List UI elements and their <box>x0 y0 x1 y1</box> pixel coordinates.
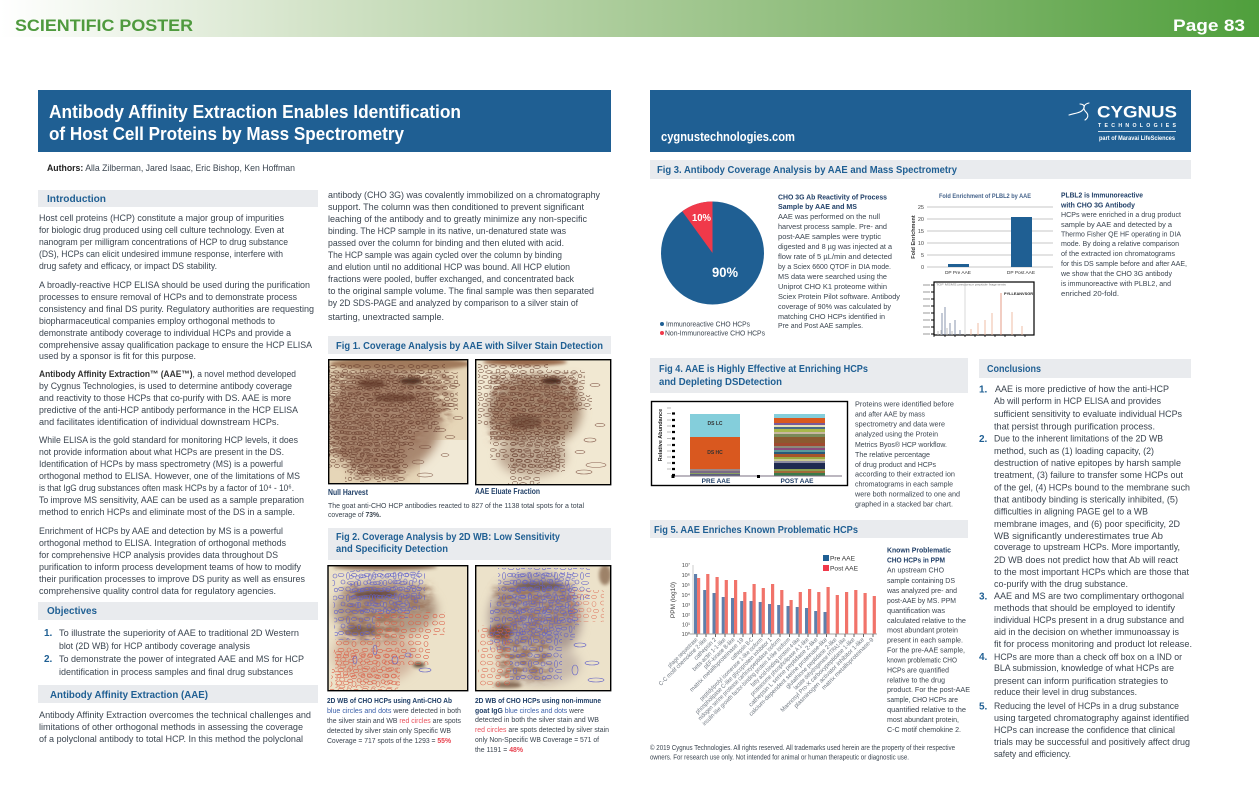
text: known problematic HCPs: For the pre-AAE sample, <box>887 646 965 654</box>
list: objectives: To illustrate the superiority of AAE to traditional 2D Western <box>59 628 299 638</box>
text: AAE right column: fractions were pooled, buffer exchanged, and concentrated back <box>328 274 574 284</box>
bar chart: fold enrichment: Fold Enrichment <box>911 215 917 259</box>
x-axis labels: calcium-dependent serine proteinase-like <box>748 637 829 718</box>
list: conclusions: HCPs can increase the confidence that clinical <box>994 725 1175 735</box>
text: introduction: their purification processes to improve DS purity as well as ensures <box>39 574 305 584</box>
stacked bar chart: POST AAE <box>780 478 814 485</box>
text: introduction: orthogonal method to ELISA. However, one of the limitations of MS <box>39 471 300 481</box>
list: conclusions: Due to the inherent limitations of the 2D WB <box>994 434 1163 444</box>
text: introduction: comprehensive quality control data for regulatory agencies. <box>39 586 276 596</box>
banner: website and logo <box>650 90 1191 152</box>
list: conclusions: coverage to upstream HCPs. More importantly, <box>994 542 1180 552</box>
text: Fig 1 note: The goat anti-CHO HCP antibodies reacted to 827 of the 1138 total spots for a total <box>328 501 584 510</box>
x-axis labels: phospholipase C-like glycoprotein inhibitor 1 <box>695 637 774 716</box>
text: Fig 1 note <box>328 501 584 519</box>
image frame: null harvest <box>329 360 468 484</box>
list: conclusions: using targeted chromatography against identified <box>994 713 1189 723</box>
chart legend <box>823 555 859 572</box>
text: Fig 4 description: and after AAE by mass <box>855 410 925 418</box>
bar chart: fold enrichment: 20 <box>918 217 924 223</box>
text: known problematic HCPs: Known Problematic <box>887 546 951 554</box>
caption: WB non-immune: goat IgG blue circles and dots were <box>475 706 584 715</box>
text: CHO 3G reactivity: CHO 3G Ab Reactivity of Process <box>778 192 887 202</box>
text: Fig 1 note: coverage of 73%. <box>328 510 381 519</box>
list: conclusions: 2D WB does not predict how that Ab will react <box>994 555 1178 565</box>
text: introduction: Host cell proteins (HCP) constitute a major group of impurities <box>39 213 284 223</box>
image frame: WB anti-CHO <box>328 566 468 691</box>
y-axis labels: 10³ <box>682 603 690 609</box>
text: Fig 4 description: analyzed using the Protein <box>855 430 938 438</box>
text: AAE right column: support. The column was then conditioned to prevent significant <box>328 202 584 212</box>
text: known problematic HCPs: CHO HCPs in PPM <box>887 556 945 564</box>
chart legend: Pre AAE <box>830 556 856 562</box>
pie chart <box>661 201 764 304</box>
panel: objectives heading: Objectives <box>47 605 97 617</box>
text: introduction: by Cygnus Technologies, is used to determine antibody coverage <box>39 381 292 391</box>
text: PLBL2: mode. By doing a relative comparison <box>1061 239 1179 248</box>
caption: WB non-immune <box>475 696 609 754</box>
text: introduction: purification to inform process development teams of how to modify <box>39 562 301 572</box>
text: introduction: Antibody Affinity Extraction™ (AAE™), a novel method developed <box>39 369 296 379</box>
y-axis labels <box>682 562 691 638</box>
caption: WB anti-CHO: the silver stain and WB red circles are spots <box>327 716 461 725</box>
list: conclusions: Reducing the level of HCPs in a drug substance <box>994 701 1179 711</box>
footer: copyright <box>650 743 955 762</box>
text: known problematic HCPs: relative to the drug <box>887 676 945 684</box>
text: CHO 3G reactivity: by a Sciex 6600 QTOF in DIA mode. <box>778 262 891 271</box>
panel: introduction heading <box>38 190 318 207</box>
list: conclusions: to the most important HCPs which are those that <box>994 567 1189 577</box>
caption: AAE eluate: AAE Eluate Fraction <box>475 487 540 496</box>
list: conclusions: BLA submission, knowledge of what HCPs are <box>994 663 1174 673</box>
list: objectives <box>44 628 304 677</box>
title banner <box>38 90 611 152</box>
image: null harvest gel <box>328 357 470 484</box>
panel: Fig 4 heading: Fig 4. AAE is Highly Effective at Enriching HCPs <box>659 363 868 375</box>
text: AAE left column: of a polyclonal antibody to total HCP. In this method the polyclonal <box>39 734 303 744</box>
list: conclusions: reduce their level in drug substances. <box>994 687 1137 697</box>
panel: Fig 4 heading <box>650 358 968 393</box>
x-axis labels: proteasome phospholipase A 1-like <box>750 637 811 698</box>
authors: Authors: Alla Zilberman, Jared Isaac, Eric Bishop, Ken Hoffman <box>47 163 295 174</box>
text: Fig 4 description: The relative percentage <box>855 450 930 459</box>
caption: WB anti-CHO: 2D WB of CHO HCPs using Anti-CHO Ab <box>327 696 452 705</box>
text: introduction: biopharmaceutical companies employ orthogonal methods to <box>39 316 275 326</box>
text: PLBL2 <box>1060 190 1187 298</box>
panel: Fig 3 heading <box>650 160 1191 179</box>
section label: SCIENTIFIC POSTER <box>15 16 193 35</box>
list: conclusions: membrane images, and (6) poor specificity, 2D <box>994 519 1180 529</box>
text: introduction: used by a sponsor is fit for this purpose. <box>39 351 196 361</box>
list: conclusions: of the gel, (4) HCPs bound to the membrane such <box>994 482 1190 492</box>
image frame: WB non-immune <box>476 566 611 691</box>
text: CHO 3G reactivity: Sample by AAE and MS <box>778 202 857 211</box>
page number: Page 83 <box>1173 16 1245 35</box>
text: introduction: A broadly-reactive HCP ELISA should be used during the purification <box>39 280 310 290</box>
bar chart: fold enrichment <box>911 194 1053 276</box>
text: introduction: processes to ensure removal of HCPs and to demonstrate process <box>39 292 297 302</box>
chart: mass spectrum: TOF MSMS precursor peptide fragments <box>936 282 1007 286</box>
text: known problematic HCPs: calculated relative to the <box>887 616 966 625</box>
bar chart: known problematic HCPs <box>658 555 877 727</box>
bar chart: fold enrichment: 25 <box>918 205 924 211</box>
text: AAE right column: The HCP sample was again cycled over the column by binding <box>328 250 562 260</box>
text: known problematic HCPs: C-C motif chemokine 2. <box>887 725 961 734</box>
text: introduction: While ELISA is the gold standard for monitoring HCP levels, it does <box>39 435 298 445</box>
text: known problematic HCPs: most abundant protein, <box>887 715 959 724</box>
text: known problematic HCPs: sample containing DS <box>887 576 955 585</box>
list: conclusions: 5. <box>979 702 988 712</box>
text: AAE right column: and elution until no additional HCP was bound. All HCP elution <box>328 262 570 272</box>
panel: Fig 1 heading: Fig 1. Coverage Analysis by AAE with Silver Stain Detection <box>336 340 603 352</box>
x-axis labels: Mannosyl Pro-X carboxypeptidase 1-like <box>780 637 857 714</box>
bar chart: fold enrichment: 5 <box>921 253 924 259</box>
list: conclusions: destruction of native epitopes by harsh sample <box>994 458 1181 468</box>
pie chart: 90% <box>712 264 739 280</box>
text: known problematic HCPs: An upstream CHO <box>887 566 944 574</box>
text: introduction: and facilitates identification of individual downstream HCPs. <box>39 417 279 427</box>
list: conclusions: difficulties in aligning PAGE gel to a WB <box>994 506 1148 516</box>
text: known problematic HCPs: was analyzed pre- and <box>886 586 957 595</box>
x-axis labels: pEF-kinase B-like <box>703 637 737 670</box>
text: CHO 3G reactivity: AAE was performed on the null <box>778 212 880 221</box>
list: conclusions: AAE is more predictive of how the anti-HCP <box>995 384 1169 394</box>
pie chart: 10% <box>692 212 712 224</box>
list: objectives: To demonstrate the power of integrated AAE and MS for HCP <box>59 654 304 664</box>
list: conclusions: WB significantly underestimates true Ab <box>994 531 1163 541</box>
caption: WB non-immune: red circles are spots detected by silver stain <box>475 725 609 734</box>
text: CHO 3G reactivity: harvest process sample. Pre- and <box>778 222 887 231</box>
list: conclusions: trials may be successful and positively affect drug <box>994 737 1190 747</box>
text: AAE right column: passed over the column for binding and then eluted with acid. <box>328 238 564 248</box>
list: conclusions: that antibody binding is sterically inhibited, (5) <box>994 494 1178 504</box>
panel: AAE heading: Antibody Affinity Extraction (AAE) <box>50 689 208 701</box>
text: CHO 3G reactivity <box>778 192 900 330</box>
bar chart: fold enrichment: 10 <box>918 241 924 247</box>
list: conclusions: methods that should be employed to identify <box>994 603 1175 613</box>
text: Fig 4 description: Metrics Byos® HCP workflow. <box>855 440 947 449</box>
text: introduction: method to enrich HCPs and eliminate most of the DS in a sample. <box>39 507 295 517</box>
text: AAE right column <box>328 190 600 322</box>
text: PLBL2: sample by AAE and detected by a <box>1061 220 1173 229</box>
list: conclusions: 4. <box>979 652 988 663</box>
pie legend: Immunoreactive CHO HCPs <box>666 320 750 328</box>
list: conclusions: co-purify with the drug substance. <box>994 579 1128 589</box>
panel: conclusions heading: Conclusions <box>987 363 1041 375</box>
pre AAE bar <box>690 414 740 476</box>
stacked bar chart: Relative Abundance <box>658 409 664 461</box>
text: AAE right column: leaching of the antibody and to greatly minimize any non-specific <box>328 214 587 224</box>
text: CHO 3G reactivity: Pre and Post AAE samples. <box>778 321 863 330</box>
text: known problematic HCPs: sample, CHO HCPs are <box>887 695 958 704</box>
x-axis labels: nidogen serine protease carboxypeptidase isoform <box>698 637 782 722</box>
x-axis labels: peptidylprolyl isomerase 1-like isoform <box>699 637 764 702</box>
panel: Fig 2 heading: Fig 2. Coverage Analysis by 2D WB: Low Sensitivity <box>336 531 560 543</box>
text: introduction: consistency and final DS purity. Regulatory authorities are requesting <box>39 304 314 314</box>
chart legend: Post AAE <box>830 566 859 572</box>
pre AAE bar: DS HC <box>707 450 723 456</box>
list: conclusions <box>979 384 1192 759</box>
text: AAE right column: to the original sample volume. The final sample was then separated <box>328 286 594 296</box>
text: PLBL2: is immunoreactive with PLBL2, and <box>1061 279 1171 288</box>
chart: mass spectrum <box>923 282 1034 337</box>
pre AAE bar: DS LC <box>708 421 723 427</box>
title banner: of Host Cell Proteins by Mass Spectrometry <box>49 123 405 144</box>
text: PLBL2: for this DS sample before and after AAE, <box>1061 259 1187 268</box>
panel: Fig 2 heading <box>328 528 611 560</box>
caption: WB non-immune: the 1191 = 48% <box>475 745 523 754</box>
x-axis labels: beta-actin 1-1-like <box>692 637 728 673</box>
stacked bar chart: PRE AAE <box>702 478 731 485</box>
text: known problematic HCPs: quantified relative to the <box>887 705 966 714</box>
y-axis labels: 10⁴ <box>682 592 691 599</box>
list: objectives: blot (2D WB) for HCP antibody coverage analysis <box>59 641 250 651</box>
text: Fig 4 description <box>854 400 960 508</box>
header band <box>0 0 1259 37</box>
post AAE bar <box>774 414 825 476</box>
text: known problematic HCPs: most abundant protein <box>887 626 958 634</box>
text: introduction: To improve MS sensitivity, AAE can be used as a sample preparation <box>39 495 304 505</box>
x-axis labels: lactate dehydrogenase HTRA1-like <box>793 637 848 691</box>
text: PLBL2: enriched 20-fold. <box>1061 289 1119 298</box>
list: conclusions: aid in the decision on whether immunoassay is <box>994 627 1179 637</box>
list: conclusions: HCPs are more than a check off box on a IND or <box>994 652 1182 662</box>
caption: WB non-immune: 2D WB of CHO HCPs using non-immune <box>475 696 601 705</box>
text: introduction: Identification of HCPs by mass spectrometry (MS) is a powerful <box>39 459 283 469</box>
x-axis labels: phage sequestrase <box>667 637 700 669</box>
text: PLBL2: with CHO 3G Antibody <box>1060 200 1136 210</box>
caption: WB anti-CHO: detected by silver stain only Specific WB <box>327 726 451 735</box>
text: introduction: nanogram per milligram concentrations of HCP to drug substance <box>39 237 288 247</box>
text: introduction: comprehensive assay qualification package to ensure the HCP ELISA <box>39 340 313 350</box>
y-axis labels: 10⁶ <box>682 572 690 579</box>
x-axis labels: insulin-like growth factor-binding protein 4-like isoform <box>702 637 792 727</box>
bar chart: fold enrichment: 15 <box>918 229 924 235</box>
logo <box>1069 102 1177 142</box>
caption: WB anti-CHO: Coverage = 717 spots of the 1293 = 55% <box>327 736 451 745</box>
text: PLBL2: we show that the CHO 3G antibody <box>1060 269 1172 278</box>
list: objectives: 2. <box>44 654 53 665</box>
text: introduction: demonstrate antibody coverage to individual HCPs and provide a <box>39 328 292 338</box>
x-axis labels: plasminogen activator inhibitor 1-like <box>793 637 866 710</box>
caption: WB anti-CHO <box>327 696 461 745</box>
panel: conclusions heading <box>979 359 1191 378</box>
text: introduction <box>39 213 314 596</box>
x-axis labels: cathepsin L serine peptidase 2-like <box>748 637 820 708</box>
website: cygnustechnologies.com <box>661 129 795 144</box>
list: conclusions: fit for process monitoring and product lot release. <box>994 639 1192 649</box>
list: conclusions: 3. <box>979 592 988 602</box>
text: introduction: is that IgG drug substances often mask HCPs by a factor of 10⁴ - 10⁶. <box>39 483 294 493</box>
panel: Fig 5 heading: Fig 5. AAE Enriches Known Problematic HCPs <box>654 524 858 536</box>
text: Fig 4 description: of drug product and HCPs <box>855 460 936 469</box>
text: PLBL2: HCPs were enriched in a drug product <box>1061 210 1182 219</box>
panel: Fig 1 heading <box>328 336 611 354</box>
bar chart: known problematic HCPs: PPM (log10) <box>670 582 677 618</box>
panel: Fig 4 heading: and Depleting DSDetection <box>659 376 782 388</box>
text: PLBL2: Thermo Fisher QE HF operating in DIA <box>1061 230 1182 238</box>
pie legend: Non-Immunoreactive CHO HCPs <box>665 328 765 338</box>
text: known problematic HCPs <box>886 546 970 734</box>
text: Fig 4 description: were both normalized to one and <box>854 490 960 498</box>
panel: objectives heading <box>38 602 318 620</box>
text: introduction: (DS), HCPs can elicit undesired immune response, interfere with <box>39 249 283 259</box>
text: known problematic HCPs: HCPs are quantified <box>887 666 949 674</box>
text: Fig 4 description: chromatograms in each sample <box>855 480 953 488</box>
text: CHO 3G reactivity: flow rate of 5 µL/min and detected <box>778 252 892 261</box>
chart: mass spectrum: PYLLEANVSGR <box>1004 292 1033 296</box>
y-axis ticks <box>672 414 675 475</box>
footer: copyright: owners. For research use only. Not intended for animal or human therapeutic or diagnostic use. <box>650 752 909 762</box>
panel: Fig 3 heading: Fig 3. Antibody Coverage Analysis by AAE and Mass Spectrometry <box>657 164 957 176</box>
pie legend <box>660 320 765 338</box>
logo: part of Maravai LifeSciences <box>1099 136 1176 142</box>
title banner: Antibody Affinity Extraction Enables Identification <box>49 101 461 122</box>
text: PLBL2: of the extracted ion chromatograms <box>1061 249 1175 258</box>
image frame: AAE eluate <box>476 360 611 485</box>
bar chart: fold enrichment: 0 <box>921 265 924 271</box>
list: conclusions: sufficient sensitivity to evaluate individual HCPs <box>994 409 1182 419</box>
footer: copyright: © 2019 Cygnus Technologies. All rights reserved. All trademarks used herein are the property of their respective <box>650 743 955 752</box>
image: AAE eluate gel <box>475 358 611 485</box>
text: PLBL2: PLBL2 is Immunoreactive <box>1061 190 1143 200</box>
text: introduction: predictive of the anti-HCP antibody performance in the HCP ELISA <box>39 405 299 415</box>
list: conclusions: present can inform purification strategies to <box>994 676 1168 686</box>
image: WB non-immune gel <box>475 565 611 691</box>
text: introduction: not provide information about what HCPs are present in the DS. <box>39 447 284 457</box>
panel: introduction heading: Introduction <box>47 193 106 205</box>
panel: Fig 5 heading <box>650 520 968 538</box>
list: conclusions: AAE and MS are two complimentary orthogonal <box>994 591 1184 601</box>
text: introduction: for comprehensive HCP analysis provides data throughout DS <box>39 550 278 560</box>
bar chart: fold enrichment: DP Post AAE <box>1007 270 1035 276</box>
text: CHO 3G reactivity: Uniprot CHO K1 proteome within <box>778 282 887 291</box>
x-axis labels: glutathione peptidase 2-like <box>785 637 839 690</box>
list: conclusions: 1. <box>979 384 988 396</box>
x-axis labels: matrix metalloproteinase 19 <box>689 637 746 693</box>
text: AAE right column: binding. The HCP sample in its native, un-denatured state was <box>328 226 566 236</box>
text: AAE right column: antibody (CHO 3G) was covalently immobilized on a chromatography <box>328 190 600 200</box>
text: known problematic HCPs: post-AAE by MS. PPM <box>887 596 956 605</box>
caption: WB non-immune: only Non-Specific WB Coverage = 571 of <box>475 735 600 744</box>
x-axis labels: cathepsin 2 <box>693 637 718 662</box>
text: AAE left column: limitations of other orthogonal methods in assessing the coverage <box>39 722 303 732</box>
y-axis labels: 10¹ <box>682 622 690 628</box>
caption: WB non-immune: detected in both the silver stain and WB <box>475 715 599 724</box>
panel: Fig 2 heading: and Specificity Detection <box>336 543 448 555</box>
text: CHO 3G reactivity: matching CHO HCPs identified in <box>778 312 885 321</box>
x-axis labels: C-C motif chemokine 2-like <box>658 637 709 687</box>
text: introduction: and reactivity to those HCPs that co-purify with DS. AAE is more <box>39 393 291 403</box>
bar chart: fold enrichment: DP Pre AAE <box>945 270 971 276</box>
logo: CYGNUS <box>1097 102 1177 122</box>
text: Fig 4 description: according to their extracted ion <box>855 470 955 478</box>
list: objectives: 1. <box>44 628 53 639</box>
panel: AAE heading <box>38 685 318 703</box>
text: AAE left column: Antibody Affinity Extraction overcomes the technical challenges and <box>39 710 311 720</box>
y-axis labels: 10⁵ <box>682 582 690 589</box>
stacked bar chart <box>652 402 848 486</box>
list: conclusions: 2. <box>979 434 988 445</box>
text: CHO 3G reactivity: MS data were searched using the <box>778 272 887 281</box>
list: conclusions: individual HCPs present in a drug substance and <box>994 615 1184 625</box>
list: objectives: identification in process samples and final drug substances <box>59 667 293 677</box>
text: introduction: orthogonal method to ELISA. Integration of orthogonal methods <box>39 538 286 548</box>
text: introduction: Enrichment of HCPs by AAE and detection by MS is a powerful <box>39 526 283 536</box>
text: introduction: for biologic drug produced using cell culture technology. Even at <box>39 225 284 235</box>
image: WB anti-CHO gel <box>328 564 468 691</box>
text: introduction: drug safety and efficacy, or impact DS stability. <box>39 261 217 271</box>
text: CHO 3G reactivity: Sciex Protein Pilot software. Antibody <box>778 292 900 301</box>
text: Fig 4 description: Proteins were identified before <box>855 400 954 408</box>
list: conclusions: Ab will perform in HCP ELISA and provides <box>994 396 1161 406</box>
text: AAE right column: by 2D SDS-PAGE and analyzed by comparison to a silver stain of <box>328 298 578 308</box>
text: CHO 3G reactivity: coverage of 90% was calculated by <box>778 302 891 311</box>
y-axis labels: 10⁰ <box>682 631 691 638</box>
logo: TECHNOLOGIES <box>1098 123 1177 129</box>
text: Fig 4 description: spectrometry and data were <box>855 420 945 428</box>
text: AAE left column <box>39 710 311 744</box>
text: known problematic HCPs: product. For the post-AAE <box>887 685 970 694</box>
bar chart: fold enrichment: Fold Enrichment of PLBL2 by AAE <box>939 194 1031 200</box>
list: conclusions: treatment, (3) failure to transfer some HCPs out <box>994 470 1183 480</box>
text: known problematic HCPs: quantification was <box>887 606 945 615</box>
x-axis labels <box>658 637 876 727</box>
text: known problematic HCPs: present in each sample. <box>887 636 963 644</box>
text: known problematic HCPs: known problematic CHO <box>887 656 957 664</box>
text: AAE right column: starting, unextracted sample. <box>328 312 444 322</box>
x-axis labels: fatty acid-binding protein 4-like <box>750 637 802 688</box>
list: conclusions: safety and efficiency. <box>994 749 1071 759</box>
list: conclusions: that persist through purification process. <box>994 422 1155 432</box>
caption: WB anti-CHO: blue circles and dots were detected in both <box>327 706 461 715</box>
text: CHO 3G reactivity: digested and 8 µg was injected at a <box>778 242 893 251</box>
text: CHO 3G reactivity: post-AAE samples were tryptic <box>778 232 881 241</box>
text: Fig 4 description: graphed in a stacked bar chart. <box>855 500 953 508</box>
x-axis labels: cathepsin B-C <box>730 637 755 662</box>
caption: null harvest: Null Harvest <box>328 488 368 497</box>
list: conclusions: method, such as (1) loading capacity, (2) <box>994 446 1154 456</box>
y-axis labels: 10² <box>682 613 690 619</box>
x-axis labels: matrix metalloproteinase-9 <box>821 637 876 691</box>
y-axis labels: 10⁷ <box>682 562 690 569</box>
